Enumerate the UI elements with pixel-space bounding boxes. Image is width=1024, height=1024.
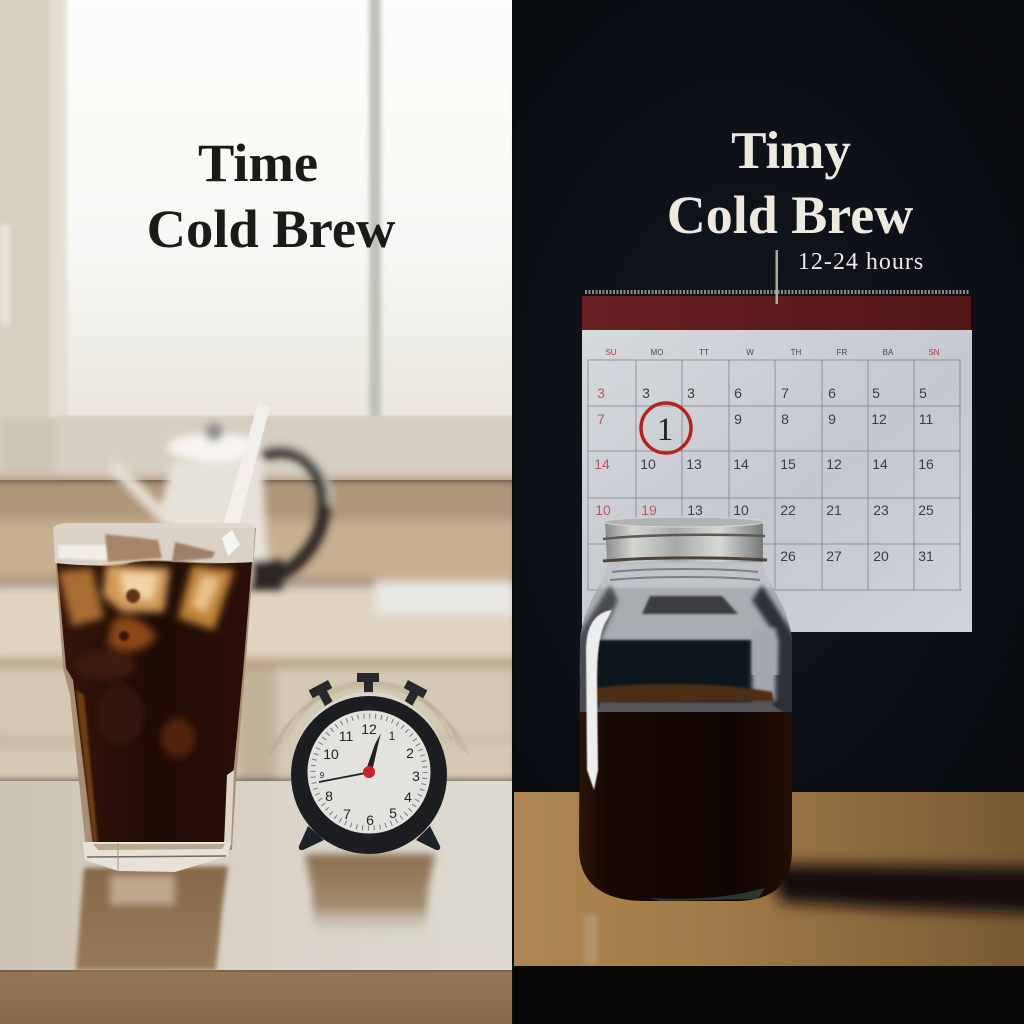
- clock numbers: 11: [339, 728, 353, 744]
- clock numbers: 10: [323, 746, 339, 762]
- title: right: [667, 122, 924, 275]
- calendar numbers: 11: [919, 411, 933, 427]
- wooden table: [514, 792, 1024, 966]
- weekday labels: TH: [791, 348, 802, 357]
- calendar numbers: 19: [641, 502, 657, 518]
- spiral binding: [585, 290, 970, 294]
- calendar numbers: 7: [781, 385, 789, 401]
- clock numbers: 1: [389, 729, 396, 743]
- calendar numbers: 16: [918, 456, 934, 472]
- coffee body: [57, 561, 252, 844]
- calendar numbers: 10: [640, 456, 656, 472]
- weekday labels: TT: [699, 348, 709, 357]
- panel: right dark setting: [512, 0, 1024, 1024]
- jar shoulder rings: [610, 569, 760, 580]
- weekday labels: MO: [651, 348, 663, 357]
- weekday labels: FR: [837, 348, 848, 357]
- calendar numbers: 14: [872, 456, 888, 472]
- table glint: [584, 915, 598, 965]
- amber side glow: [76, 690, 98, 844]
- clock numbers: 8: [325, 788, 333, 804]
- glass base: [83, 842, 231, 872]
- calendar numbers: 31: [918, 548, 934, 564]
- duration label: 12-24 hours: [798, 249, 924, 275]
- panel: left bright kitchen: [0, 0, 520, 1024]
- weekday labels: SN: [928, 348, 940, 357]
- calendar numbers: 7: [597, 411, 605, 427]
- calendar numbers: 21: [826, 502, 842, 518]
- calendar numbers: 9: [828, 411, 836, 427]
- table reflections: [76, 854, 435, 970]
- calendar numbers: 26: [780, 548, 796, 564]
- wall calendar: [582, 250, 972, 632]
- weekday labels: W: [746, 348, 754, 357]
- calendar numbers: 12: [826, 456, 842, 472]
- kitchen background: [0, 0, 520, 783]
- title: left: Time: [198, 132, 318, 193]
- circled date: [641, 403, 691, 453]
- calendar numbers: 25: [918, 502, 934, 518]
- calendar numbers: 8: [781, 411, 789, 427]
- calendar numbers: 10: [733, 502, 749, 518]
- title: left: Cold Brew: [147, 198, 396, 259]
- clock hands: [319, 733, 381, 782]
- jar body contents: [575, 555, 800, 907]
- calendar numbers: 14: [594, 456, 610, 472]
- table front: [514, 966, 1024, 1024]
- calendar numbers: 9: [734, 411, 742, 427]
- calendar numbers: 6: [828, 385, 836, 401]
- alarm clock: [270, 673, 468, 854]
- calendar paper: [582, 330, 972, 632]
- calendar numbers: 22: [780, 502, 796, 518]
- title: right: Timy: [731, 122, 851, 180]
- glass walls: [53, 528, 256, 850]
- title: right: Cold Brew: [667, 185, 913, 245]
- clock numbers: 9: [320, 771, 325, 780]
- sound waves: [270, 681, 468, 755]
- iced coffee glass: [53, 403, 270, 872]
- clock feet: [299, 826, 440, 850]
- silver rim: [292, 692, 446, 850]
- calendar numbers: 15: [780, 456, 796, 472]
- red header: [582, 296, 971, 330]
- calendar numbers: 14: [733, 456, 749, 472]
- weekday labels: SU: [605, 348, 617, 357]
- calendar numbers: 3: [642, 385, 650, 401]
- hanging nail: [776, 250, 778, 304]
- title: left: [147, 132, 396, 259]
- calendar grid: [588, 360, 962, 590]
- calendar numbers: 3: [687, 385, 695, 401]
- straw: [221, 403, 270, 535]
- calendar numbers: 6: [734, 385, 742, 401]
- table shadow: [770, 864, 1024, 914]
- kettle: [112, 423, 330, 590]
- calendar numbers: 13: [686, 456, 702, 472]
- calendar numbers: 20: [873, 548, 889, 564]
- calendar numbers: 13: [687, 502, 703, 518]
- mason jar: [575, 517, 800, 907]
- calendar numbers: 5: [872, 385, 880, 401]
- clock body: [291, 696, 447, 854]
- tick marks: [313, 716, 425, 828]
- clock numbers: 2: [406, 745, 414, 761]
- ice cubes: [58, 564, 234, 758]
- clock numbers: 3: [412, 768, 420, 784]
- circled date: 1: [657, 412, 673, 448]
- clock numbers: 6: [366, 812, 374, 828]
- calendar numbers: 3: [597, 385, 605, 401]
- frosted rim: [53, 523, 255, 565]
- calendar numbers: 23: [873, 502, 889, 518]
- clock numbers: 12: [361, 721, 377, 737]
- glass highlight: [224, 770, 234, 845]
- calendar numbers: 12: [871, 411, 887, 427]
- calendar numbers: 10: [595, 502, 611, 518]
- top knobs: [309, 673, 427, 711]
- clock numbers: 7: [343, 806, 351, 822]
- clock numbers: [320, 721, 420, 828]
- clock face: [308, 710, 430, 834]
- dark wall: [512, 0, 1024, 793]
- wooden table: [0, 781, 512, 1024]
- calendar numbers: 5: [919, 385, 927, 401]
- clock numbers: 5: [389, 805, 397, 821]
- calendar numbers: 27: [826, 548, 842, 564]
- clock numbers: 4: [404, 789, 412, 805]
- weekday labels: BA: [883, 348, 894, 357]
- calendar numbers: [594, 385, 934, 564]
- jar neck: [605, 517, 763, 562]
- weekday labels: [605, 348, 940, 357]
